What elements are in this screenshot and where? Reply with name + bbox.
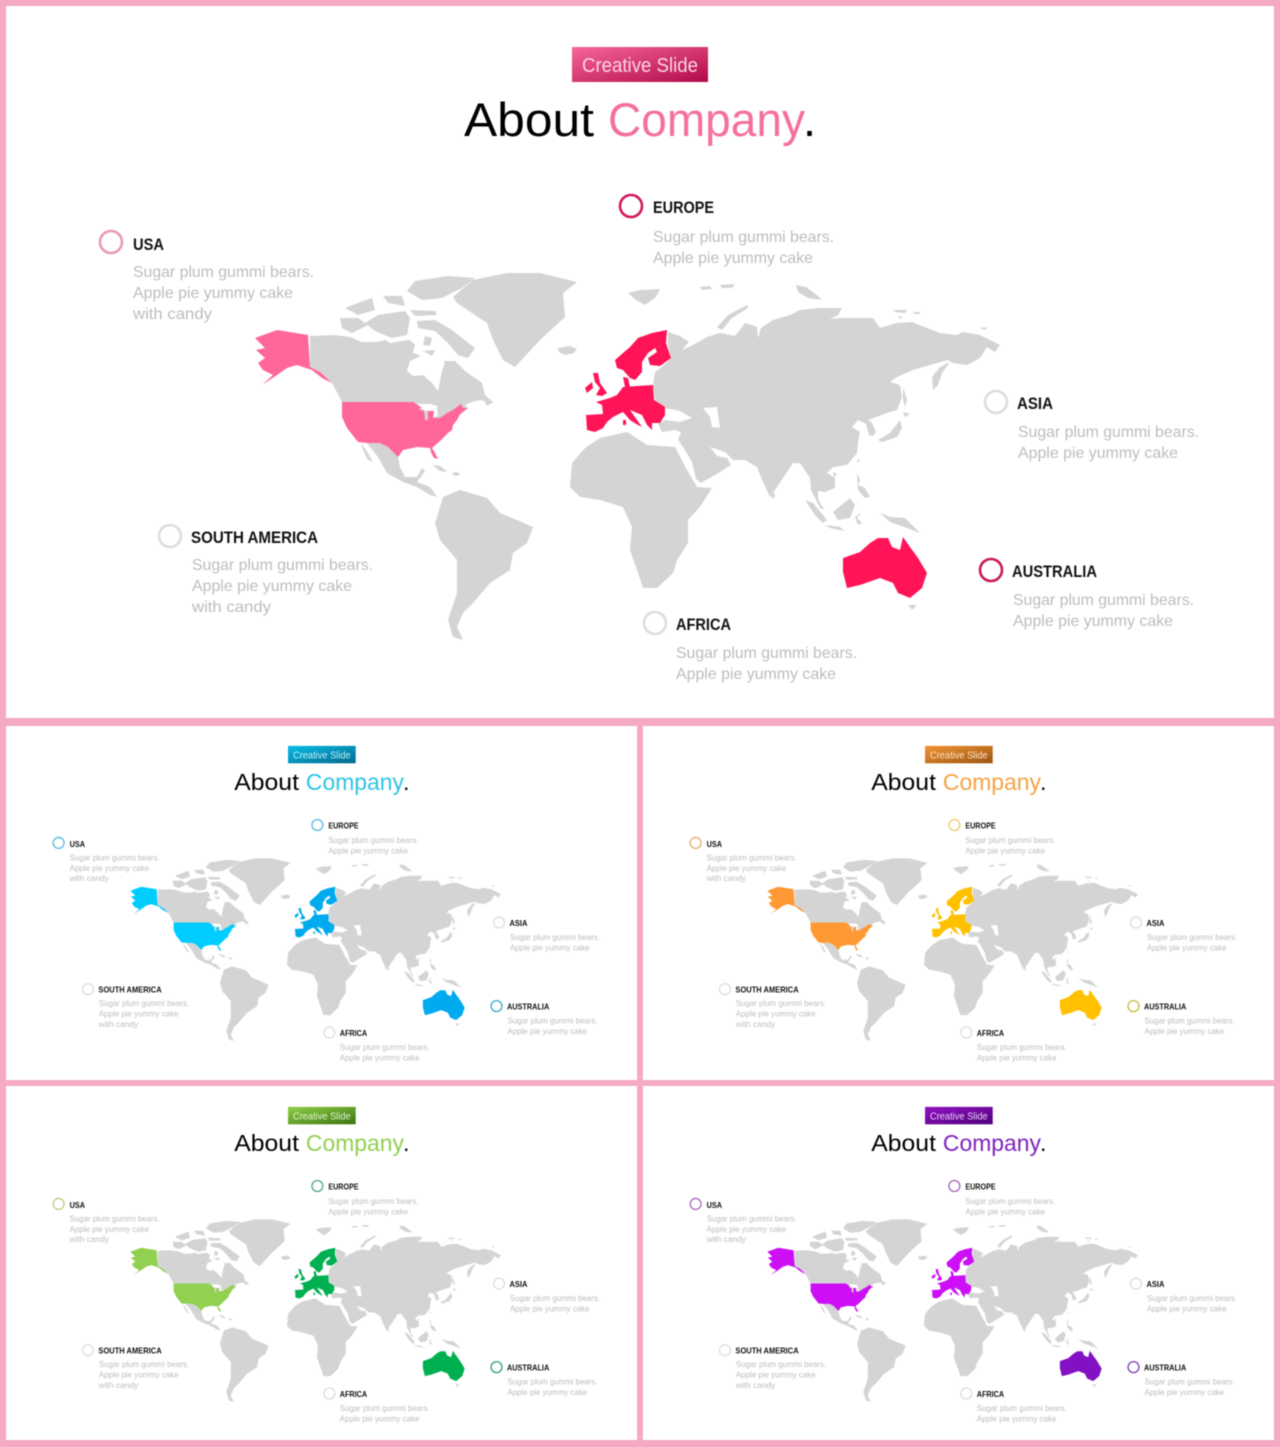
label: USA: USA: [133, 235, 164, 254]
world map: [767, 1219, 1138, 1402]
title: Company: [608, 93, 805, 146]
label: Europe: Apple pie yummy cake: [965, 846, 1046, 855]
label: Australia: [1128, 1362, 1235, 1397]
label: Asia: [985, 391, 1199, 462]
badge: Creative Slide: Creative Slide: [930, 750, 988, 761]
label: Asia: ASIA: [509, 1279, 527, 1289]
label: Australia: Sugar plum gummi bears.: [1013, 592, 1194, 609]
label: Asia: [1131, 917, 1237, 952]
label: Africa: Apple pie yummy cake: [340, 1053, 420, 1062]
title: About: [871, 769, 937, 795]
label: South America: with candy: [191, 599, 271, 616]
label: Europe: EUROPE: [965, 820, 996, 830]
badge: Creative Slide: [925, 1107, 993, 1124]
title: About: [234, 1130, 300, 1156]
title: .: [1040, 769, 1046, 795]
label: Australia: Apple pie yummy cake: [1144, 1388, 1225, 1397]
label: USA: Sugar plum gummi bears.: [70, 853, 160, 862]
label: Australia: Apple pie yummy cake: [507, 1027, 588, 1036]
label: USA: Apple pie yummy cake: [133, 285, 293, 302]
badge: Creative Slide: [925, 746, 993, 763]
label: Australia: Apple pie yummy cake: [1013, 613, 1173, 630]
label: USA: with candy: [69, 1235, 109, 1244]
label: Europe: Sugar plum gummi bears.: [965, 836, 1055, 845]
label: USA: [690, 1198, 797, 1244]
label: Asia: ASIA: [1146, 918, 1164, 928]
label: USA: Apple pie yummy cake: [70, 864, 150, 873]
label: Australia: Sugar plum gummi bears.: [507, 1017, 598, 1026]
title: .: [803, 93, 816, 146]
label: Africa: [961, 1027, 1067, 1062]
label: South America: with candy: [735, 1020, 775, 1029]
label: USA: [53, 837, 160, 883]
label: Australia: Sugar plum gummi bears.: [507, 1378, 598, 1387]
label: Africa: Apple pie yummy cake: [340, 1414, 420, 1423]
label: Africa: [324, 1027, 430, 1062]
label: Asia: ASIA: [509, 918, 527, 928]
world map: [130, 1219, 501, 1402]
badge: Creative Slide: Creative Slide: [293, 750, 351, 761]
label: Africa: Sugar plum gummi bears.: [340, 1404, 430, 1413]
label: Australia: [980, 559, 1194, 630]
label: Australia: AUSTRALIA: [1144, 1002, 1186, 1012]
label: South America: [720, 984, 826, 1029]
label: South America: Sugar plum gummi bears.: [736, 1360, 826, 1369]
label: Asia: Apple pie yummy cake: [1147, 1304, 1227, 1313]
label: South America: SOUTH AMERICA: [98, 1346, 162, 1356]
label: Africa: Sugar plum gummi bears.: [676, 645, 857, 662]
label: Europe: [312, 1181, 418, 1216]
label: Asia: Apple pie yummy cake: [1147, 943, 1227, 952]
label: Asia: Apple pie yummy cake: [510, 943, 590, 952]
label: USA: Sugar plum gummi bears.: [707, 1214, 797, 1223]
title: [871, 1130, 1046, 1156]
panel: blue slide: [6, 726, 637, 1080]
title: .: [1040, 1130, 1046, 1156]
label: Australia: AUSTRALIA: [507, 1002, 549, 1012]
label: USA: Apple pie yummy cake: [70, 1225, 150, 1234]
title: Company: [943, 769, 1041, 795]
label: South America: SOUTH AMERICA: [98, 985, 162, 995]
label: Asia: Sugar plum gummi bears.: [1147, 933, 1237, 942]
label: Asia: ASIA: [1146, 1279, 1164, 1289]
label: USA: Apple pie yummy cake: [707, 1225, 787, 1234]
title: [871, 769, 1046, 795]
badge: Creative Slide: Creative Slide: [582, 55, 698, 77]
label: South America: Sugar plum gummi bears.: [99, 999, 189, 1008]
label: Asia: Apple pie yummy cake: [1018, 445, 1178, 462]
label: Asia: [494, 917, 600, 952]
label: Africa: [324, 1388, 430, 1423]
panel: main pink slide: [6, 6, 1274, 718]
label: Europe: Apple pie yummy cake: [328, 846, 409, 855]
label: Australia: [1128, 1001, 1235, 1036]
label: Africa: AFRICA: [977, 1389, 1004, 1399]
title: [464, 93, 816, 146]
title: About: [464, 93, 594, 146]
title: .: [403, 1130, 409, 1156]
title: Company: [306, 769, 404, 795]
label: Africa: Sugar plum gummi bears.: [977, 1404, 1067, 1413]
label: Africa: Sugar plum gummi bears.: [977, 1043, 1067, 1052]
label: Europe: Apple pie yummy cake: [965, 1207, 1046, 1216]
label: USA: Sugar plum gummi bears.: [707, 853, 797, 862]
label: Europe: Sugar plum gummi bears.: [653, 229, 834, 246]
panel: green slide: [6, 1086, 637, 1440]
label: Asia: Sugar plum gummi bears.: [510, 1294, 600, 1303]
label: Europe: Sugar plum gummi bears.: [328, 836, 418, 845]
label: Asia: Sugar plum gummi bears.: [1018, 424, 1199, 441]
label: Europe: [620, 195, 834, 267]
label: Europe: Apple pie yummy cake: [653, 250, 813, 267]
label: Africa: AFRICA: [977, 1028, 1004, 1038]
label: South America: Sugar plum gummi bears.: [99, 1360, 189, 1369]
label: USA: USA: [707, 839, 722, 849]
label: Europe: Sugar plum gummi bears.: [328, 1197, 418, 1206]
label: USA: USA: [70, 839, 85, 849]
label: Asia: [1131, 1278, 1237, 1313]
label: South America: Apple pie yummy cake: [192, 578, 352, 595]
badge: Creative Slide: [572, 47, 708, 82]
label: Australia: AUSTRALIA: [1012, 562, 1097, 581]
title: About: [234, 769, 300, 795]
label: USA: Apple pie yummy cake: [707, 864, 787, 873]
label: South America: SOUTH AMERICA: [191, 528, 318, 547]
label: Europe: EUROPE: [653, 198, 714, 217]
title: [234, 769, 409, 795]
label: Africa: AFRICA: [340, 1028, 367, 1038]
label: Australia: Sugar plum gummi bears.: [1144, 1378, 1235, 1387]
label: Australia: AUSTRALIA: [1144, 1363, 1186, 1373]
badge: Creative Slide: Creative Slide: [930, 1111, 988, 1122]
label: Africa: AFRICA: [340, 1389, 367, 1399]
label: Australia: Apple pie yummy cake: [1144, 1027, 1225, 1036]
label: Africa: Apple pie yummy cake: [977, 1053, 1057, 1062]
label: South America: [83, 984, 189, 1029]
title: .: [403, 769, 409, 795]
world map: [255, 273, 1000, 640]
badge: Creative Slide: [288, 746, 356, 763]
label: USA: [690, 837, 797, 883]
label: USA: [100, 231, 314, 323]
label: Australia: Apple pie yummy cake: [507, 1388, 588, 1397]
label: Europe: [949, 820, 1055, 855]
label: Africa: [644, 612, 857, 683]
label: Europe: Apple pie yummy cake: [328, 1207, 409, 1216]
label: Australia: Sugar plum gummi bears.: [1144, 1017, 1235, 1026]
label: South America: with candy: [98, 1020, 138, 1029]
label: South America: [159, 525, 373, 616]
label: USA: Sugar plum gummi bears.: [133, 264, 314, 281]
label: Europe: Sugar plum gummi bears.: [965, 1197, 1055, 1206]
label: South America: with candy: [98, 1381, 138, 1390]
label: USA: USA: [70, 1200, 85, 1210]
label: Australia: AUSTRALIA: [507, 1363, 549, 1373]
panel: purple slide: [643, 1086, 1274, 1440]
label: Asia: Sugar plum gummi bears.: [510, 933, 600, 942]
label: Europe: EUROPE: [328, 820, 359, 830]
label: Africa: AFRICA: [676, 615, 731, 634]
title: Company: [306, 1130, 404, 1156]
label: Europe: EUROPE: [965, 1181, 996, 1191]
label: South America: SOUTH AMERICA: [735, 1346, 799, 1356]
title: About: [871, 1130, 937, 1156]
label: USA: with candy: [69, 874, 109, 883]
label: Asia: [494, 1278, 600, 1313]
label: USA: Sugar plum gummi bears.: [70, 1214, 160, 1223]
label: South America: Apple pie yummy cake: [736, 1010, 816, 1019]
label: USA: [53, 1198, 160, 1244]
label: USA: with candy: [132, 306, 212, 323]
label: South America: with candy: [735, 1381, 775, 1390]
label: Europe: EUROPE: [328, 1181, 359, 1191]
badge: Creative Slide: Creative Slide: [293, 1111, 351, 1122]
label: Africa: Sugar plum gummi bears.: [340, 1043, 430, 1052]
badge: Creative Slide: [288, 1107, 356, 1124]
label: Australia: [491, 1001, 598, 1036]
label: South America: Apple pie yummy cake: [736, 1371, 816, 1380]
label: Asia: Sugar plum gummi bears.: [1147, 1294, 1237, 1303]
title: [234, 1130, 409, 1156]
label: South America: Apple pie yummy cake: [99, 1010, 179, 1019]
world map: [130, 858, 501, 1041]
title: Company: [943, 1130, 1041, 1156]
label: South America: Sugar plum gummi bears.: [192, 557, 373, 574]
label: South America: [720, 1345, 826, 1390]
label: South America: SOUTH AMERICA: [735, 985, 799, 995]
label: USA: with candy: [706, 874, 746, 883]
label: South America: Apple pie yummy cake: [99, 1371, 179, 1380]
label: Asia: Apple pie yummy cake: [510, 1304, 590, 1313]
label: Europe: [949, 1181, 1055, 1216]
panel: orange slide: [643, 726, 1274, 1080]
label: Africa: [961, 1388, 1067, 1423]
label: Africa: Apple pie yummy cake: [676, 666, 836, 683]
label: Australia: [491, 1362, 598, 1397]
label: South America: [83, 1345, 189, 1390]
label: South America: Sugar plum gummi bears.: [736, 999, 826, 1008]
world map: [767, 858, 1138, 1041]
label: USA: USA: [707, 1200, 722, 1210]
label: USA: with candy: [706, 1235, 746, 1244]
label: Asia: ASIA: [1017, 394, 1053, 413]
label: Africa: Apple pie yummy cake: [977, 1414, 1057, 1423]
label: Europe: [312, 820, 418, 855]
